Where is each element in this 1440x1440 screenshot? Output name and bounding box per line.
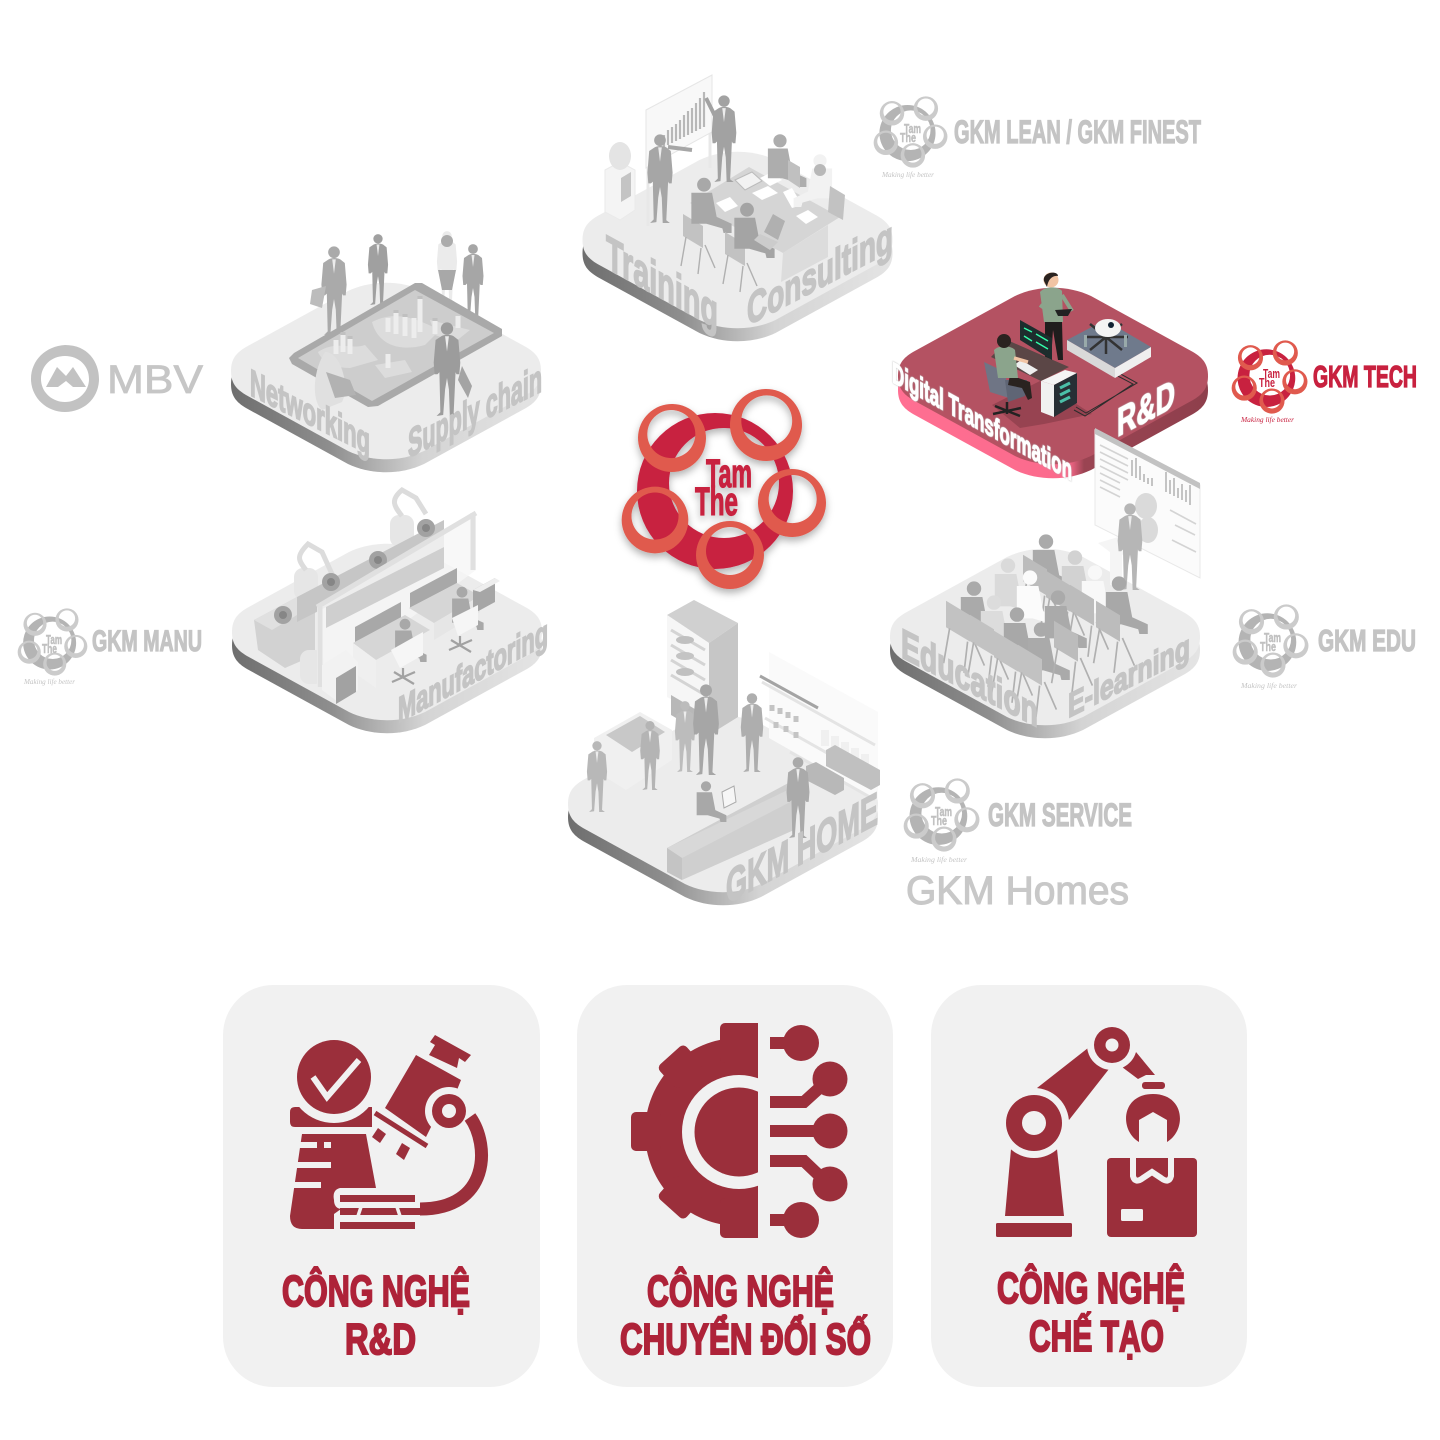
panel: Digital Transformation and R&D platform: [892, 272, 1208, 488]
icon: half gear with circuit: [631, 1023, 848, 1238]
icon: microscope with check: [288, 1031, 482, 1229]
logo: GKM Manu: [18, 608, 202, 686]
logo: GKM Edu: [1233, 604, 1416, 690]
logo: GKM Tech: The: [1259, 375, 1275, 390]
logo: GKM Service: [904, 778, 1132, 864]
caption: CÔNG NGHỆ: [282, 1265, 470, 1316]
caption: R&D: [345, 1315, 416, 1364]
logo: MBV: MBV: [107, 358, 203, 402]
logo: GKM Edu: Tam: [1264, 630, 1281, 645]
logo: GKM Manu: The: [42, 641, 57, 656]
label: Training: Training: [606, 224, 718, 340]
caption: [997, 1262, 1185, 1361]
logo: MBV: [31, 345, 203, 412]
icon: robot arm with box: [996, 1020, 1197, 1237]
label: Networking: Networking: [250, 361, 370, 463]
label: Digital Transformation: Digital Transformation: [892, 355, 1072, 488]
logo: GKM Service: Tam: [935, 804, 952, 819]
caption: CHẾ TẠO: [1029, 1311, 1164, 1361]
caption: CÔNG NGHỆ: [997, 1262, 1185, 1313]
logo: GKM Manu: Making life better: [23, 678, 75, 686]
logo wordmark: [695, 452, 752, 524]
label: R&D: R&D: [1117, 371, 1175, 446]
logo: GKM Tech: Making life better: [1240, 416, 1294, 424]
panel: Manufactoring platform: [232, 490, 548, 733]
illustration: R&D lab: [984, 272, 1151, 428]
label: GKM HOME: GKM HOME: [726, 783, 878, 914]
caption: CÔNG NGHỆ: [647, 1265, 834, 1316]
logo: GKM Edu: Making life better: [1240, 682, 1297, 690]
logo: GKM Lean / GKM Finest: [874, 96, 1201, 179]
logo: GKM Edu: The: [1260, 639, 1276, 654]
caption: [282, 1265, 470, 1364]
panel: Education and E-learning platform: [890, 428, 1200, 738]
card: digital transformation technology: [577, 985, 893, 1387]
caption: [620, 1265, 871, 1364]
logo: central Tam The: [622, 383, 831, 589]
label: E-learning: E-learning: [1068, 626, 1190, 726]
card: manufacturing technology: [931, 985, 1247, 1387]
logo wordmark: The: [695, 480, 738, 524]
logo: GKM Tech: [1232, 340, 1417, 424]
logo: GKM Lean / GKM Finest: The: [900, 130, 916, 145]
panel: Training and Consulting platform: [582, 75, 893, 341]
label: Education: Education: [901, 620, 1038, 737]
panel: Networking and Supply chain platform: [231, 231, 542, 472]
card: R&D technology: [223, 985, 540, 1387]
big crimson ring: [637, 413, 793, 569]
illustration: home store: [587, 600, 880, 880]
illustration: networking table: [289, 231, 502, 416]
logo: GKM Service: GKM SERVICE: [988, 797, 1132, 833]
caption: CHUYỂN ĐỔI SỐ: [620, 1313, 871, 1364]
logo: GKM Lean / GKM Finest: GKM LEAN / GKM FINEST: [954, 114, 1201, 150]
logo: GKM Lean / GKM Finest: Tam: [904, 121, 921, 136]
logo: GKM Lean / GKM Finest: Making life better: [881, 171, 934, 179]
panel: GKM Home platform: [568, 600, 880, 914]
illustration: training room: [605, 75, 845, 292]
logo: GKM Manu: GKM MANU: [92, 625, 202, 658]
illustration: presentation board: [1095, 428, 1200, 578]
logo: GKM Homes: GKM Homes: [906, 869, 1129, 913]
five coral rings: [622, 383, 831, 589]
label: Supply chain: Supply chain: [408, 355, 542, 466]
logo: GKM Service: Making life better: [910, 856, 967, 864]
logo wordmark: Tam: [706, 452, 752, 496]
logo: GKM Manu: Tam: [46, 632, 62, 647]
label: Manufactoring: Manufactoring: [398, 612, 548, 731]
illustration: presenter and audience: [944, 503, 1148, 717]
label: Consulting: Consulting: [747, 211, 893, 335]
logo: GKM Tech: Tam: [1263, 366, 1280, 381]
logo: GKM Service: The: [931, 813, 947, 828]
illustration: factory line: [254, 490, 500, 704]
